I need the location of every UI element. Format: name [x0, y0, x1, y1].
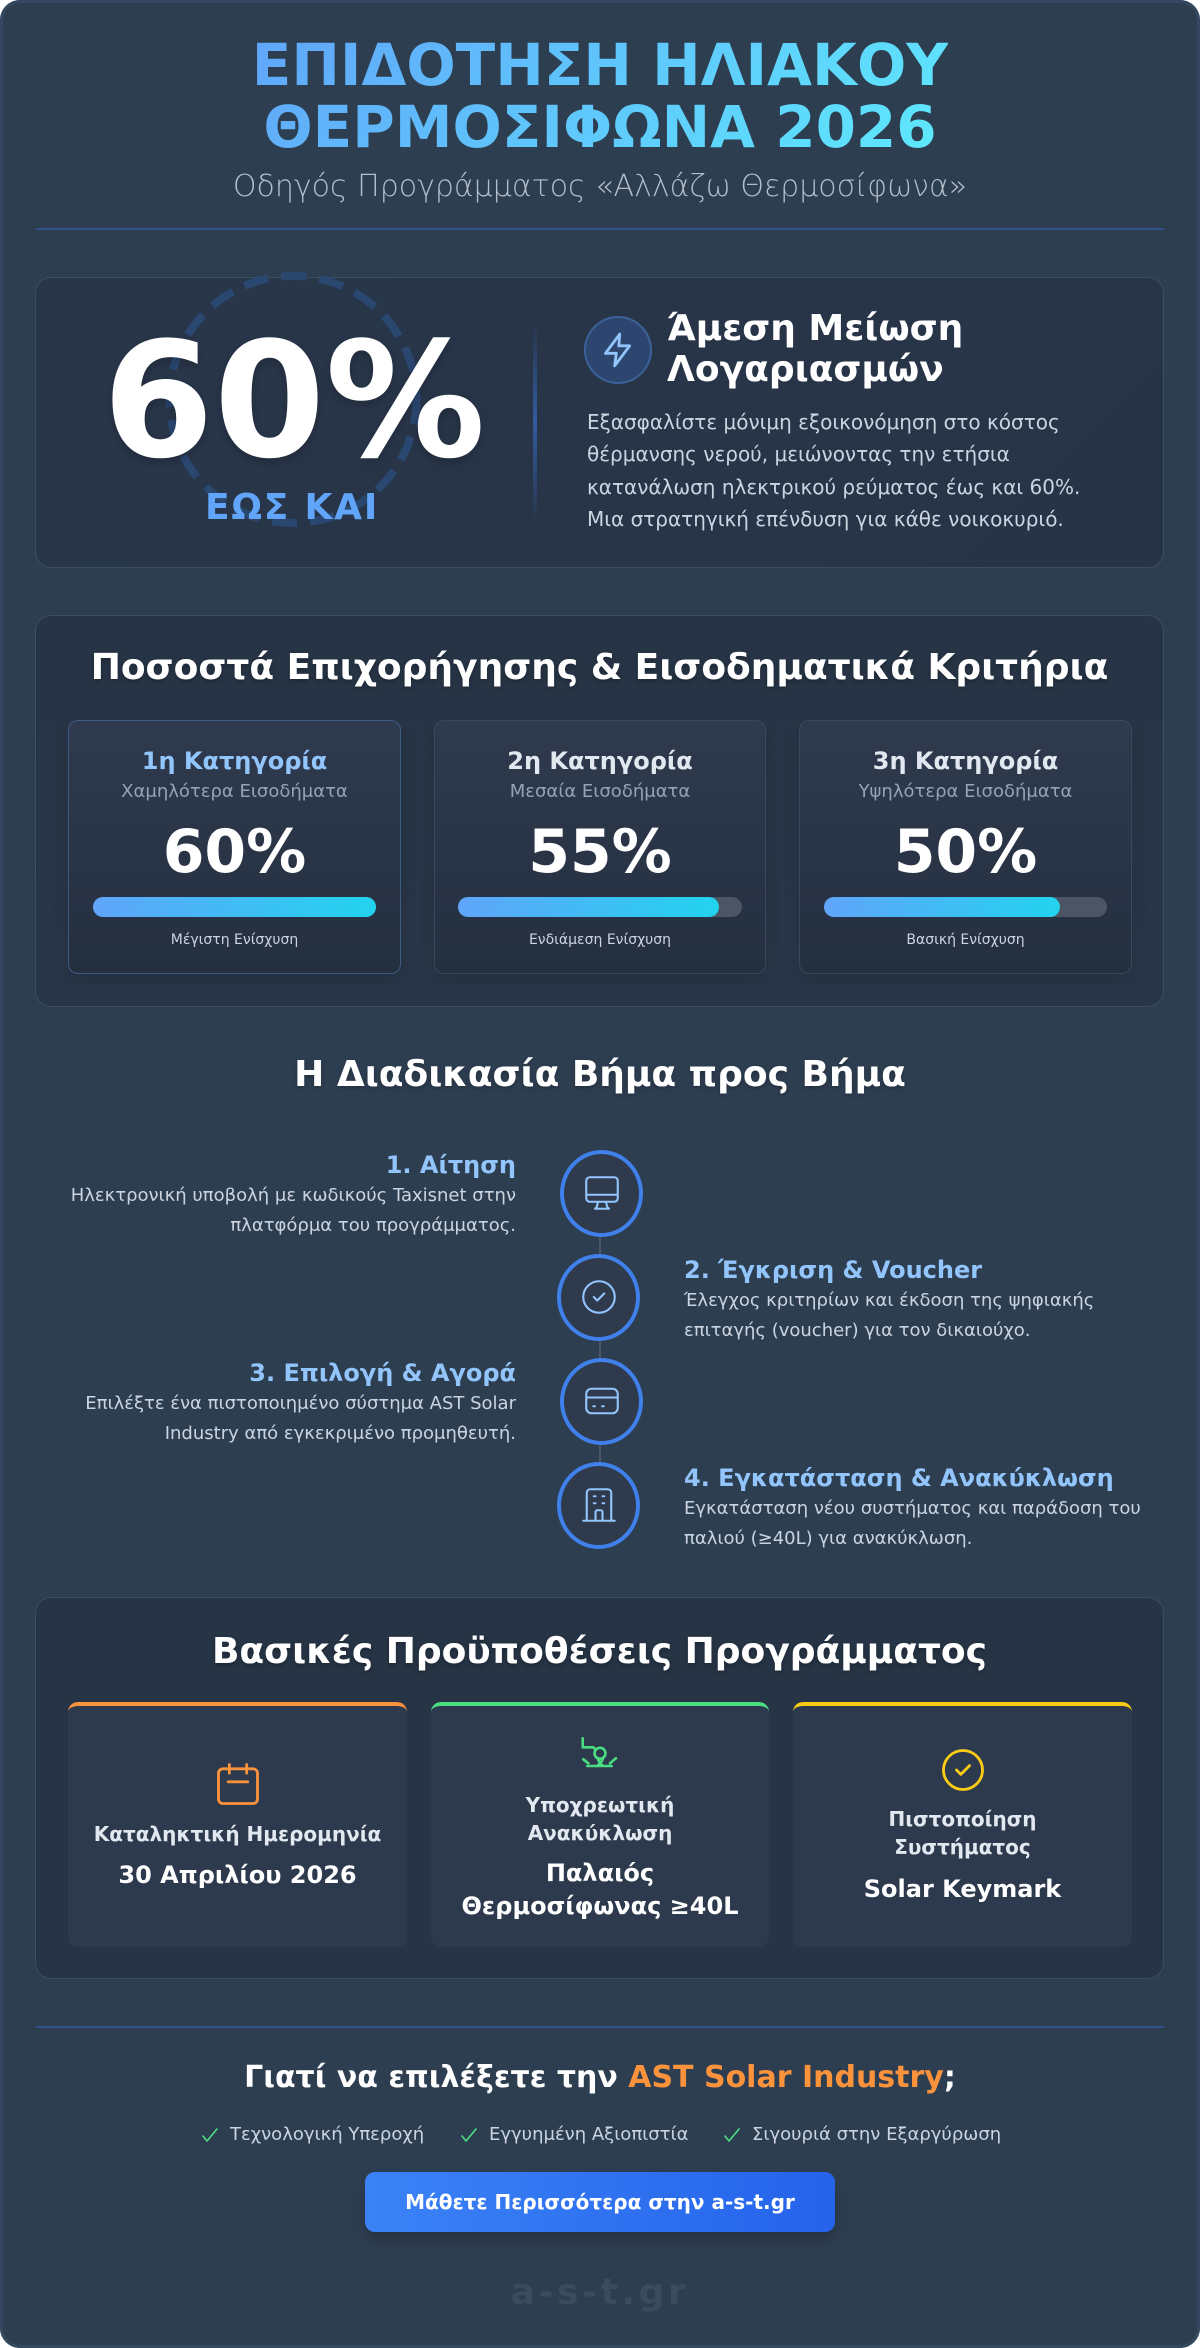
hero description: Εξασφαλίστε μόνιμη εξοικονόμηση στο κόστος [587, 410, 1060, 434]
progress bar [458, 897, 742, 917]
category name: 1η Κατηγορία [142, 747, 327, 775]
percentage: 50% [894, 817, 1037, 887]
category name: 3η Κατηγορία [873, 747, 1058, 775]
icon: recycling [581, 1737, 618, 1768]
percentage: 55% [528, 817, 672, 887]
recycling value [462, 1859, 738, 1920]
card: recycling [431, 1702, 769, 1947]
hero heading [667, 308, 963, 390]
icon: certified check [942, 1749, 984, 1791]
footer watermark: a-s-t.gr [511, 2272, 689, 2313]
step 2 text: επιταγής (voucher) για τον δικαιούχο. [684, 1320, 1031, 1341]
icon: step 1 computer [560, 1150, 643, 1237]
card: category 3 [799, 720, 1132, 974]
card: certification [793, 1702, 1132, 1947]
step 3 text: Industry από εγκεκριμένο προμηθευτή. [165, 1423, 516, 1444]
step 4 text: παλιού (≥40L) για ανακύκλωση. [684, 1528, 972, 1549]
deadline label: Καταληκτική Ημερομηνία [94, 1822, 381, 1846]
title [252, 31, 948, 161]
step 3 text: Επιλέξτε ένα πιστοποιημένο σύστημα AST Solar [85, 1393, 516, 1414]
eos kai label: ΕΩΣ ΚΑΙ [205, 487, 379, 528]
section heading: Ποσοστά Επιχορήγησης & Εισοδηματικά Κριτήρια [91, 647, 1108, 688]
icon: step 4 building [557, 1462, 640, 1549]
call to action button: Μάθετε Περισσότερα στην a-s-t.gr [405, 2190, 795, 2214]
step 4 text: Εγκατάσταση νέου συστήματος και παράδοση του [684, 1498, 1141, 1519]
step 1 text: Ηλεκτρονική υποβολή με κωδικούς Taxisnet στην [71, 1185, 516, 1206]
title: ΘΕΡΜΟΣΙΦΩΝΑ 2026 [263, 93, 937, 161]
step 2 text: Έλεγχος κριτηρίων και έκδοση της ψηφιακής [684, 1290, 1094, 1311]
income level: Μεσαία Εισοδήματα [510, 781, 690, 802]
hero heading: Άμεση Μείωση [667, 308, 963, 349]
hero description: Μια στρατηγική επένδυση για κάθε νοικοκυριό. [587, 507, 1064, 531]
hero description: κατανάλωση ηλεκτρικού ρεύματος έως και 60%. [587, 475, 1080, 499]
step 1 text: 1. Αίτηση [386, 1151, 516, 1179]
support label: Βασική Ενίσχυση [906, 932, 1025, 948]
support label: Μέγιστη Ενίσχυση [171, 932, 298, 948]
timeline connector [599, 1190, 601, 1510]
recycling value: Θερμοσίφωνας ≥40L [462, 1892, 738, 1920]
card: category 2 [434, 720, 766, 974]
panel: subsidy categories [35, 615, 1164, 1007]
income level: Χαμηλότερα Εισοδήματα [121, 781, 348, 802]
progress bar [93, 897, 376, 917]
progress bar [824, 897, 1107, 917]
step 1 text [71, 1151, 516, 1236]
support label: Ενδιάμεση Ενίσχυση [529, 932, 671, 948]
category name: 2η Κατηγορία [507, 747, 693, 775]
icon: step 3 card [560, 1358, 643, 1445]
certification value: Solar Keymark [864, 1875, 1061, 1903]
panel: requirements [35, 1597, 1164, 1979]
icon: step 2 check [557, 1254, 640, 1341]
certification label: Συστήματος [894, 1835, 1031, 1859]
hero heading: Λογαριασμών [667, 349, 944, 390]
title: ΕΠΙΔΟΤΗΣΗ ΗΛΙΑΚΟΥ [252, 31, 948, 99]
step 4 text: 4. Εγκατάσταση & Ανακύκλωση [684, 1464, 1114, 1492]
heading: process steps: Η Διαδικασία Βήμα προς Βήμα [294, 1054, 906, 1095]
closing heading: Γιατί να επιλέξετε την AST Solar Industry; [244, 2060, 956, 2095]
deadline value: 30 Απριλίου 2026 [118, 1861, 357, 1889]
call to action button [365, 2172, 835, 2232]
step 2 text [684, 1256, 1094, 1341]
benefit 3: Σιγουριά στην Εξαργύρωση [752, 2124, 1001, 2145]
panel: hero savings [35, 277, 1164, 568]
hero description: θέρμανσης νερού, μειώνοντας την ετήσια [587, 442, 1010, 466]
subtitle: Οδηγός Προγράμματος «Αλλάζω Θερμοσίφωνα» [233, 169, 967, 204]
icon: lightning bolt [584, 316, 652, 384]
percentage: 60% [163, 817, 306, 887]
recycling label [526, 1793, 674, 1845]
hero description [587, 410, 1080, 531]
section heading: Βασικές Προϋποθέσεις Προγράμματος [212, 1631, 987, 1672]
income level: Υψηλότερα Εισοδήματα [859, 781, 1072, 802]
certification label [888, 1807, 1037, 1859]
icon: calendar [217, 1763, 259, 1805]
card: category 1 [68, 720, 401, 974]
step 3 text: 3. Επιλογή & Αγορά [249, 1359, 516, 1387]
step 3 text [85, 1359, 516, 1444]
certification label: Πιστοποίηση [888, 1807, 1037, 1831]
benefit 1: Τεχνολογική Υπεροχή [230, 2124, 424, 2145]
step 2 text: 2. Έγκριση & Voucher [684, 1256, 982, 1284]
recycling label: Υποχρεωτική [526, 1793, 674, 1817]
benefits list [202, 2124, 1001, 2145]
recycling label: Ανακύκλωση [528, 1821, 672, 1845]
big percentage: 60% [103, 307, 485, 494]
recycling value: Παλαιός [546, 1859, 654, 1887]
step 4 text [684, 1464, 1141, 1549]
step 1 text: πλατφόρμα του προγράμματος. [230, 1215, 516, 1236]
card: deadline [68, 1702, 407, 1947]
benefit 2: Εγγυημένη Αξιοπιστία [489, 2124, 688, 2145]
decorative dashed ring [166, 272, 420, 527]
